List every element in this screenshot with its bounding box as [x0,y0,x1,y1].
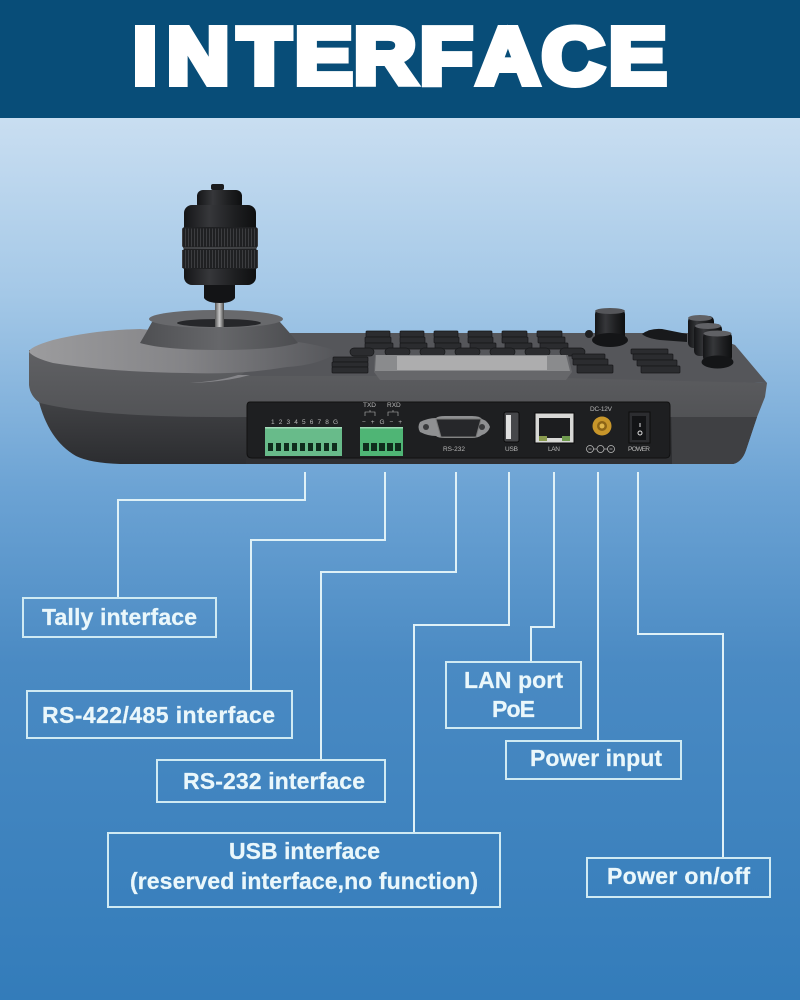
label: Power input: Power input [530,745,662,771]
label: Power input [506,741,681,779]
RS-422/485 terminal: RXD [387,402,401,409]
display screen [374,355,572,380]
connector line: power switch [638,472,723,858]
label: USB interface [108,833,500,907]
RS-422/485 terminal: − + G − + [362,419,402,426]
RS-422/485 terminal [360,402,403,456]
controller device [29,184,767,464]
label: Tally interface [23,598,216,637]
label: RS-232 interface: RS-232 interface [183,768,365,794]
joystick base disc [29,329,338,373]
connector line: USB [414,472,509,833]
joystick dome [140,310,298,350]
RS-232 port: RS-232 [443,446,465,453]
DC power jack: DC-12V [590,406,613,413]
label: RS-422/485 interface [27,691,292,738]
label: USB interface: (reserved interface,no function) [130,868,478,894]
label: RS-232 interface [157,760,385,802]
connector line: RS-232 [321,472,456,760]
header banner [0,0,800,118]
title: INTERFACE [133,11,667,101]
RS-422/485 terminal: TXD [363,402,376,409]
RS-232 port [418,416,490,453]
power switch: POWER [628,446,650,453]
LAN port: LAN [548,446,560,453]
lever [642,329,687,342]
tally terminal: 1 2 3 4 5 6 7 8 G [271,419,338,426]
USB port [504,412,519,453]
connector line: LAN [531,472,554,662]
connector line: RS-422/485 [251,472,385,691]
controller body [29,333,767,464]
knobs right [688,315,734,368]
connector line: tally [118,472,305,598]
label: Tally interface: Tally interface [42,604,197,630]
joystick handle [182,184,258,327]
power switch [628,412,650,453]
label: LAN port PoE [446,662,581,728]
label: RS-422/485 interface: RS-422/485 interface [42,702,275,728]
knob [585,308,628,347]
USB port: USB [505,446,518,453]
connector line: power input [597,472,599,741]
LAN port [535,413,574,453]
label: Power on/off: Power on/off [607,863,750,889]
DC power jack [586,406,614,452]
port panel [247,402,670,458]
tally terminal [265,419,342,456]
label: USB interface: USB interface [229,838,380,864]
keypad [332,331,680,373]
label: LAN port PoE: PoE [492,696,535,722]
label: Power on/off [587,858,770,897]
label: LAN port PoE: LAN port [464,667,563,693]
